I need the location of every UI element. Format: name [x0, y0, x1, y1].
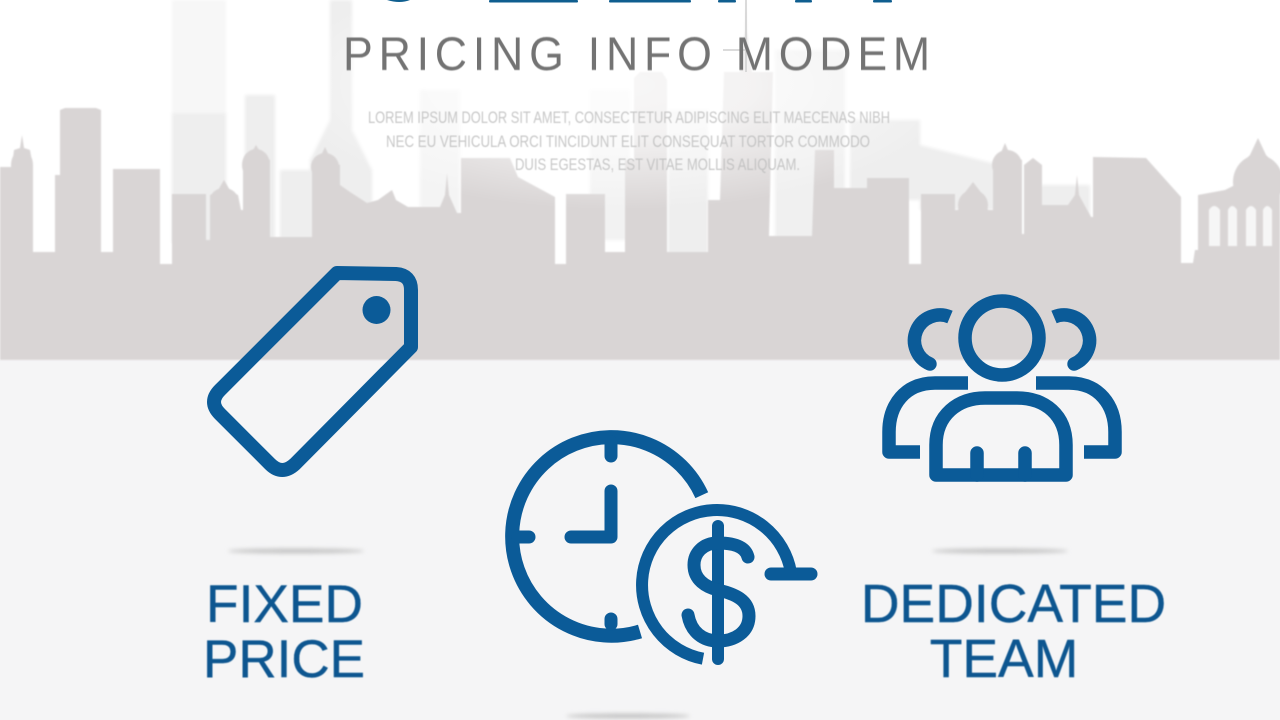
icon: clock with dollar coin — [512, 437, 811, 659]
label: fixed price: PRICE — [203, 630, 365, 689]
label: dedicated team: TEAM — [930, 630, 1078, 689]
skyline: pale background layer — [172, 0, 1090, 255]
subtitle: PRICING INFO MODEM — [343, 28, 930, 80]
description text — [368, 108, 890, 174]
shadow under team icon — [932, 548, 1068, 554]
shadow under price tag — [228, 548, 364, 554]
shadow under clock icon — [566, 714, 690, 718]
coin arc — [642, 510, 791, 659]
icon: price tag — [214, 273, 411, 470]
description text: LOREM IPSUM DOLOR SIT AMET, CONSECTETUR ADIPISCING ELIT MAECENAS NIBH — [368, 108, 890, 127]
label: dedicated team: DEDICATED — [861, 575, 1166, 634]
clock face — [512, 437, 702, 636]
description text: NEC EU VEHICULA ORCI TINCIDUNT ELIT CONSEQUAT TORTOR COMMODO — [386, 132, 870, 151]
spire line crossing the subtitle — [723, 0, 746, 72]
dollar sign — [712, 526, 724, 659]
description text: DUIS EGESTAS, EST VITAE MOLLIS ALIQUAM. — [515, 155, 800, 174]
skyline: front silhouette — [0, 0, 1280, 360]
clock hands — [571, 491, 611, 537]
coin arrow bar — [771, 568, 811, 580]
white fade behind the heading — [270, 0, 970, 215]
label: dedicated team — [861, 575, 1166, 689]
icon: team — [889, 301, 1115, 475]
clock ticks — [518, 442, 611, 624]
label: fixed price — [203, 575, 365, 689]
title: clipped letter bottoms — [387, 0, 892, 2]
label: fixed price: FIXED — [206, 575, 363, 634]
